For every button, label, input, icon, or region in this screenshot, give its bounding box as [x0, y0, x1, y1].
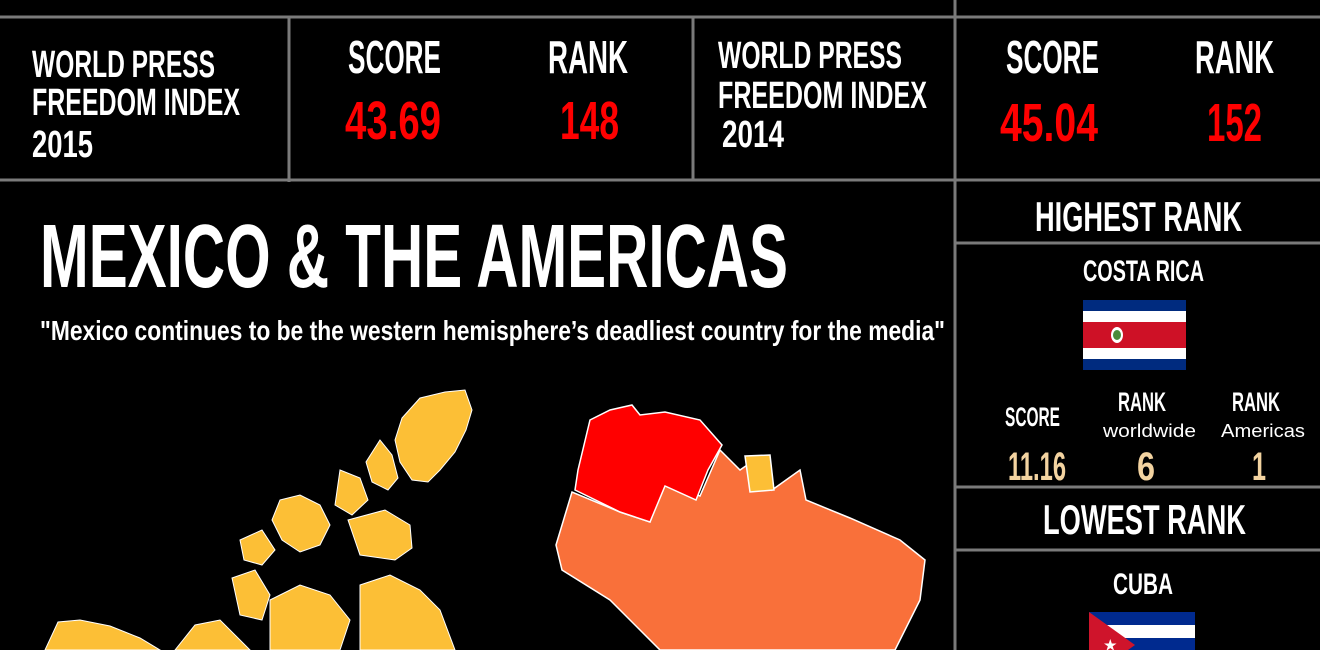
stats: Costa Rica [1005, 387, 1305, 489]
panel: 2014 score and rank: 45.04 [1000, 93, 1098, 153]
map: Canada arctic [45, 390, 472, 650]
stats: Costa Rica: RANK [1232, 387, 1280, 417]
quote: "Mexico continues to be the western hemisphere’s deadliest country for the media" [40, 315, 945, 346]
panel: index 2015 label: 2015 [32, 124, 93, 166]
panel: 2015 score and rank [345, 31, 628, 151]
panel: index 2014 label [718, 35, 927, 156]
label: Costa Rica: COSTA RICA [1083, 255, 1204, 288]
panel: index 2015 label: WORLD PRESS [32, 44, 215, 86]
panel: 2014 score and rank [1000, 31, 1274, 153]
panel: index 2014 label: WORLD PRESS [718, 35, 902, 77]
label: Cuba: CUBA [1113, 568, 1173, 601]
title: MEXICO & THE AMERICAS [40, 207, 788, 307]
panel: 2015 score and rank: RANK [548, 31, 628, 83]
stats: Costa Rica: RANK [1118, 387, 1166, 417]
panel: 2014 score and rank: 152 [1207, 93, 1262, 153]
panel: index 2014 label: FREEDOM INDEX [718, 75, 927, 117]
stats: Costa Rica: Americas [1221, 421, 1305, 441]
panel: 2014 score and rank: SCORE [1006, 31, 1099, 83]
panel: 2015 score and rank: SCORE [348, 31, 441, 83]
panel: 2015 score and rank: 43.69 [345, 91, 441, 151]
stats: Costa Rica: SCORE [1005, 402, 1060, 432]
stats: Costa Rica: 1 [1252, 445, 1266, 489]
stats: Costa Rica: worldwide [1102, 421, 1196, 441]
panel: 2015 score and rank: 148 [560, 91, 619, 151]
stats: Costa Rica: 6 [1137, 445, 1155, 489]
icon: Cuba flag [1089, 612, 1195, 650]
panel: index 2015 label [32, 44, 240, 166]
map: South America [556, 405, 925, 650]
panel: index 2015 label: FREEDOM INDEX [32, 82, 240, 124]
stats: Costa Rica: 11.16 [1008, 445, 1066, 489]
icon: Costa Rica flag [1083, 300, 1186, 370]
panel: index 2014 label: 2014 [722, 114, 784, 156]
